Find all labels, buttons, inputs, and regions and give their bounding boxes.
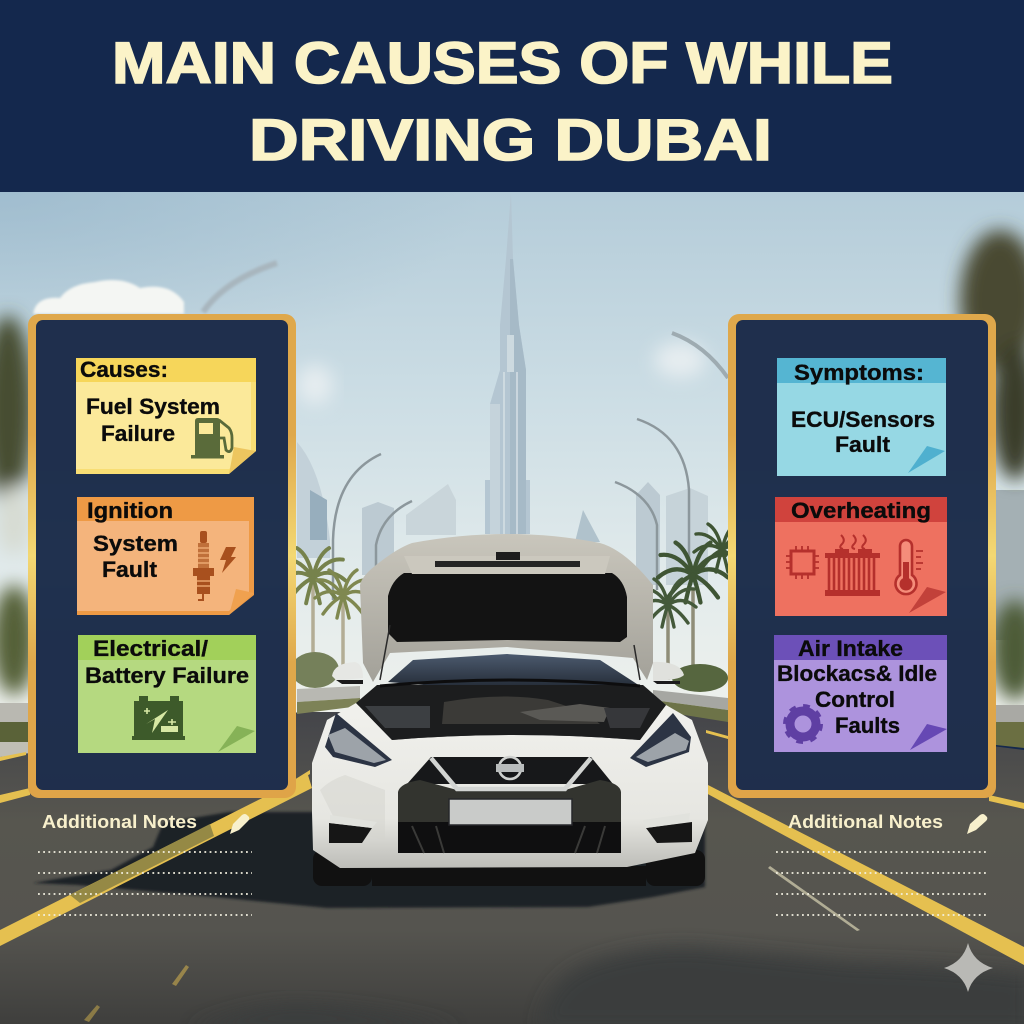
sticky note: ECU sensors fault: ECU/Sensors: [791, 407, 935, 432]
fog lights: [329, 813, 692, 843]
open hood: [360, 534, 653, 682]
panel: symptoms: [728, 314, 996, 798]
sticky note: electrical battery failure: Electrical/: [93, 636, 208, 661]
icon: thermometer: [896, 540, 923, 594]
sticky note: fuel system failure: [76, 357, 256, 474]
additional notes: left: Additional Notes: [42, 812, 197, 832]
icon: pencil: [230, 814, 249, 834]
additional notes: right: [776, 812, 988, 915]
icon: lightning bolt: [220, 547, 236, 573]
panel: causes: [28, 314, 296, 798]
icon: microchip: [786, 546, 819, 579]
road surface: [0, 712, 1024, 1024]
title: MAIN CAUSES OF WHILE: [112, 31, 893, 96]
engine bay: [356, 680, 666, 740]
car with open hood: [312, 534, 708, 886]
skyline buildings: [297, 442, 1024, 640]
palm trees: [281, 524, 750, 692]
sticky note: air intake blockage and idle control faults: Air Intake: [798, 636, 903, 661]
mirrors: [332, 662, 684, 684]
yellow road markings: [0, 730, 1024, 1022]
sparkle watermark: [944, 943, 993, 992]
sticky note: electrical battery failure: [78, 635, 256, 753]
icon: pencil: [967, 814, 987, 834]
sticky note: ECU sensors fault: [777, 358, 946, 476]
sticky note: ECU sensors fault: Symptoms:: [794, 360, 924, 385]
sticky note: ECU sensors fault: Fault: [835, 432, 891, 457]
sticky note: air intake blockage and idle control faults: Control: [815, 687, 895, 712]
front grille: [398, 757, 621, 853]
title: [112, 31, 893, 173]
sticky note: air intake blockage and idle control faults: [774, 635, 947, 752]
street lamps: [203, 263, 728, 600]
license plate: [449, 799, 572, 825]
sticky note: ignition system fault: System: [93, 531, 178, 556]
sticky note: fuel system failure: Failure: [101, 421, 175, 446]
wheels: [313, 850, 705, 886]
car body: [312, 703, 708, 868]
Burj Khalifa tower: [485, 192, 530, 534]
Nissan badge: [496, 757, 524, 779]
icon: spark plug: [193, 531, 214, 600]
sticky note: fuel system failure: Causes:: [80, 357, 168, 382]
blurred side palms: [0, 230, 1024, 700]
icon: gear: [786, 706, 820, 742]
sticky note: fuel system failure: Fuel System: [86, 394, 220, 419]
sticky note: ignition system fault: [77, 497, 254, 615]
header banner: [0, 0, 1024, 192]
sticky note: ignition system fault: Ignition: [87, 498, 173, 523]
additional notes: left: [38, 812, 252, 915]
sticky note: overheating: [775, 497, 947, 616]
cloud: [33, 280, 184, 314]
title: DRIVING DUBAI: [249, 108, 772, 173]
sticky note: ignition system fault: Fault: [102, 557, 158, 582]
icon: radiator with steam: [825, 535, 880, 596]
sticky note: air intake blockage and idle control faults: Faults: [835, 713, 900, 738]
shadows on the road: [33, 812, 705, 908]
additional notes: right: Additional Notes: [788, 812, 943, 832]
sticky note: overheating: Overheating: [791, 498, 931, 523]
headlights: [325, 713, 691, 767]
icon: fuel pump: [191, 418, 232, 458]
sticky note: electrical battery failure: Battery Failure: [85, 663, 249, 688]
icon: car battery: [132, 696, 185, 740]
sticky note: air intake blockage and idle control faults: Blockacs& Idle: [777, 661, 937, 686]
windscreen: [388, 654, 640, 692]
